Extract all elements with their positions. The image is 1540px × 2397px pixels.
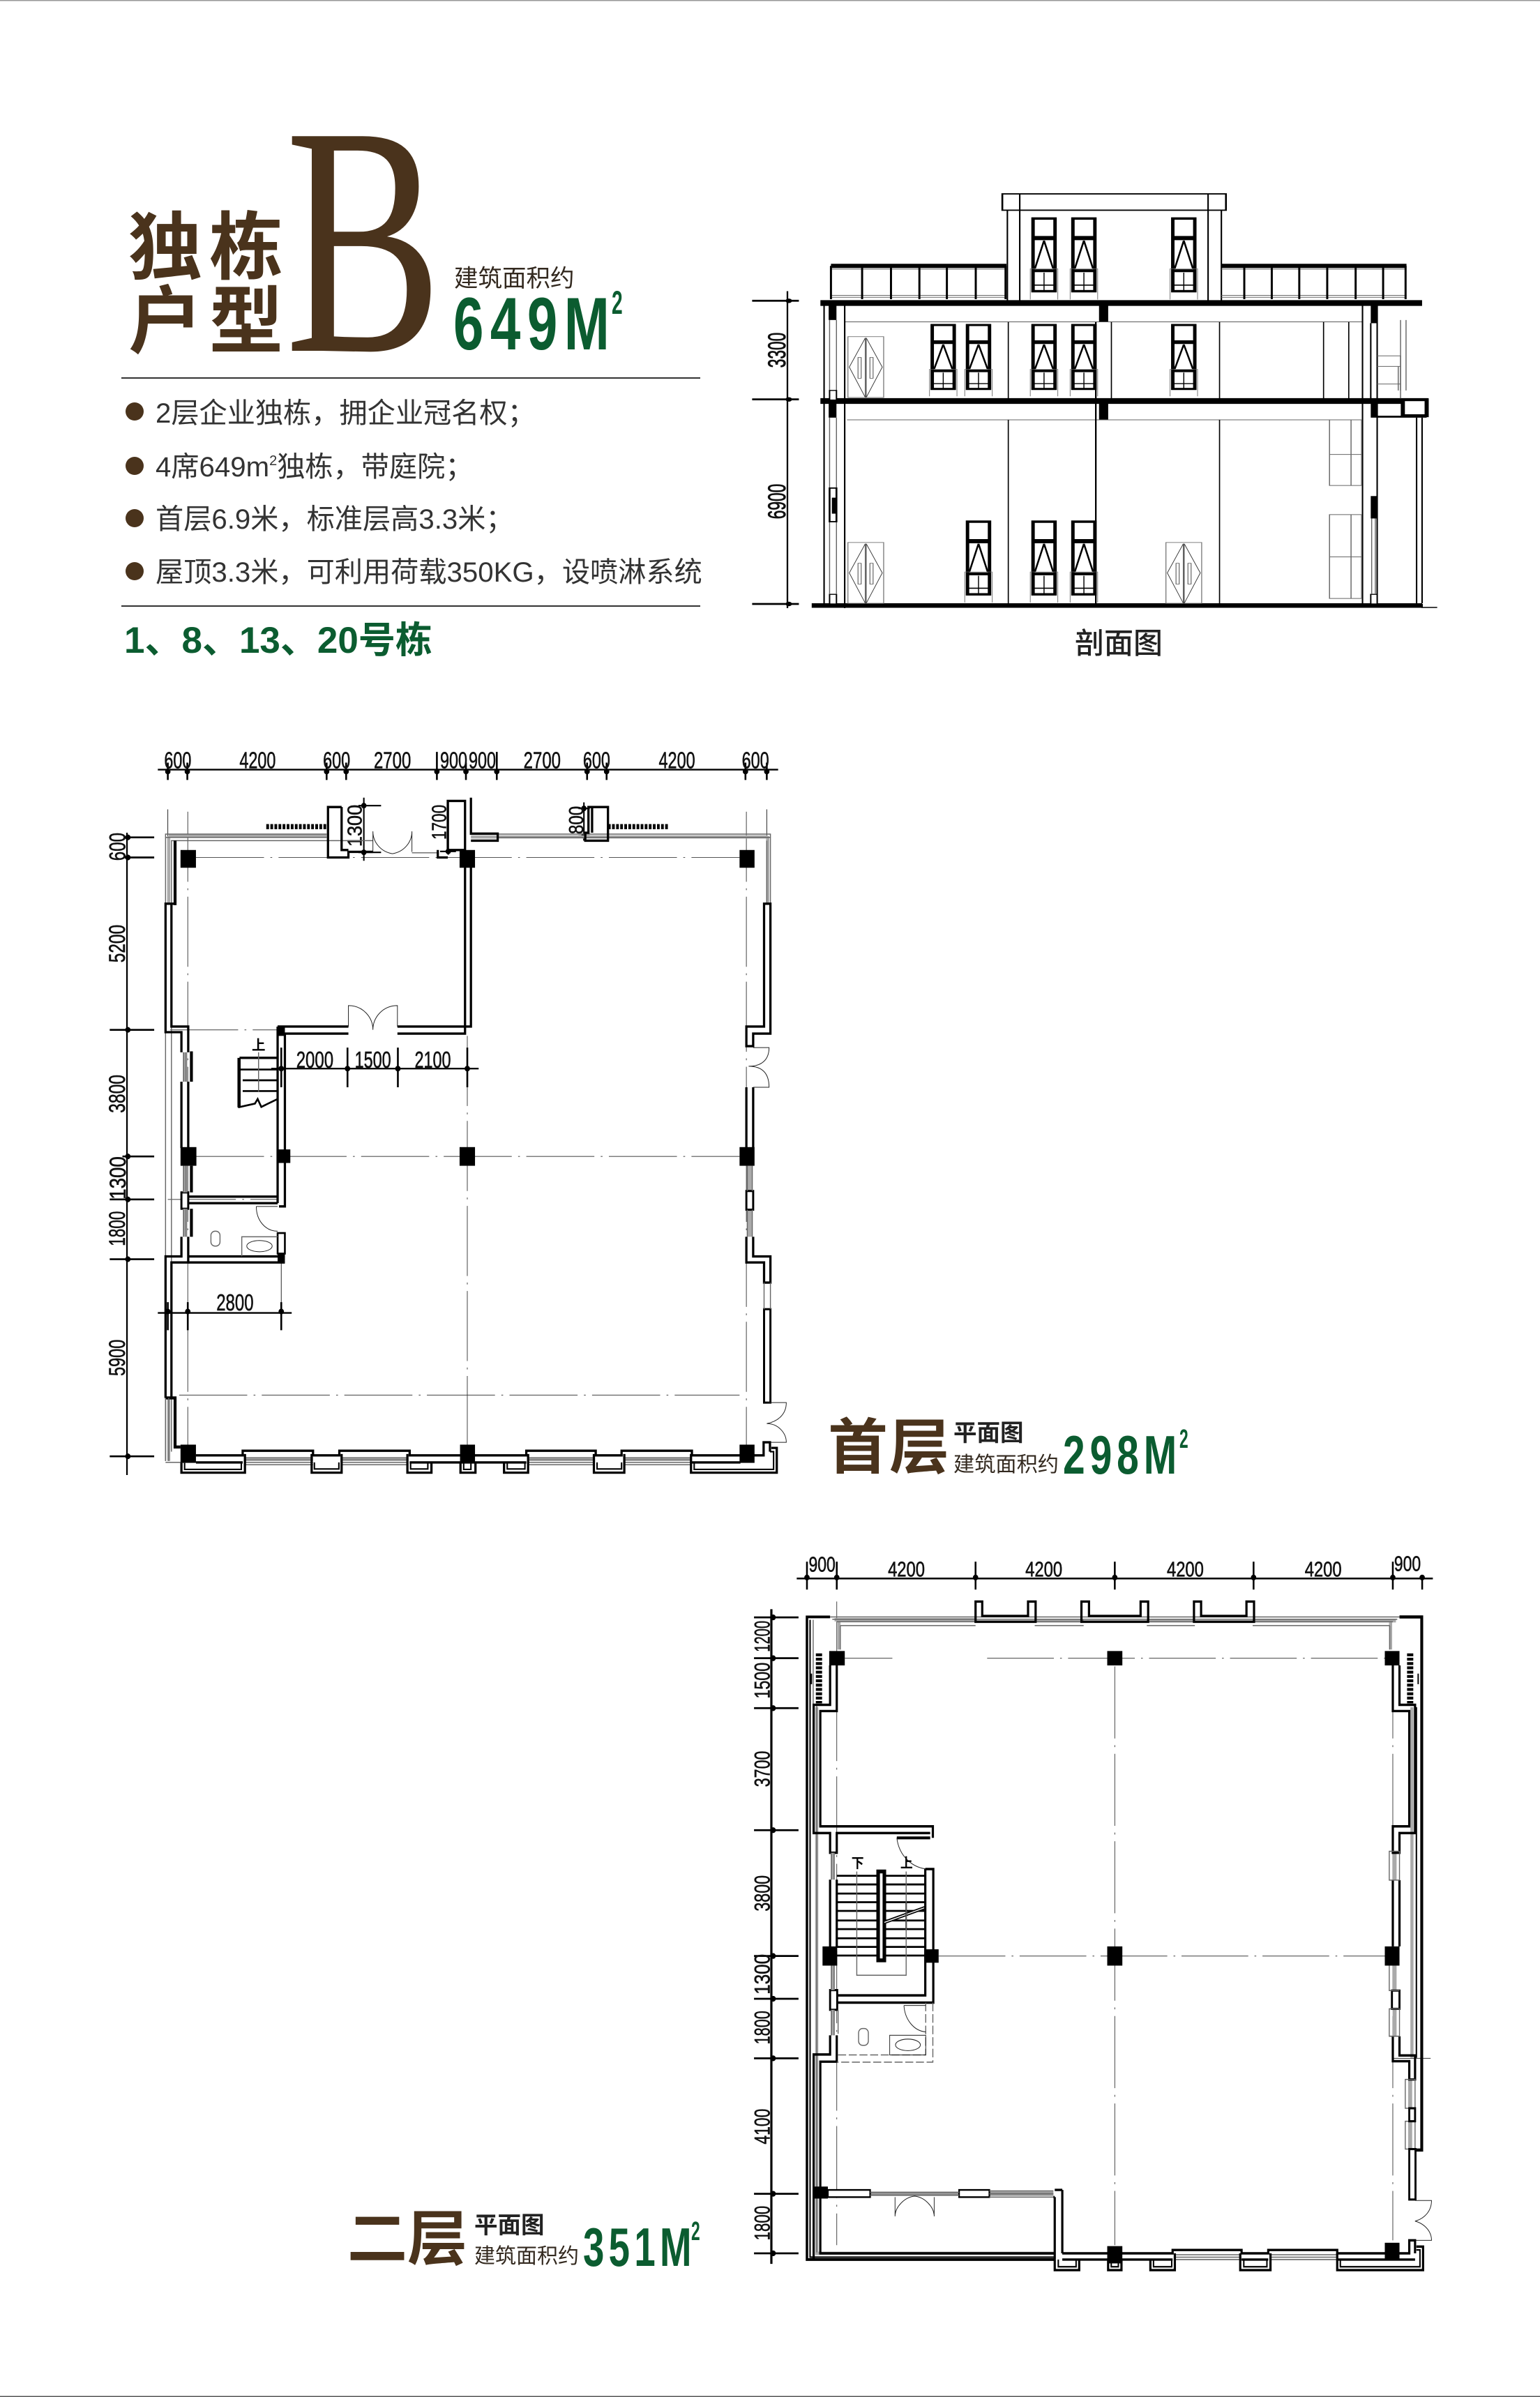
top dimension chain: 900 (809, 1554, 836, 1577)
left dimension chain: 3800 (750, 1875, 774, 1912)
first floor superscript: 2 (1179, 1424, 1188, 1453)
inner dimensions: 2800 (216, 1290, 254, 1315)
top dimension chain: 4200 (659, 747, 695, 773)
left dimension chain: 1800 (750, 2206, 774, 2240)
left dimension chain: 1500 (750, 1663, 774, 1699)
top dimension chain: 900 (440, 747, 467, 773)
section drawing (752, 194, 1437, 660)
second floor area value: 351M (583, 2217, 696, 2278)
title: building type: 型 (209, 281, 283, 363)
first floor caption (828, 1414, 1188, 1485)
inner dimensions: 800 (566, 806, 588, 834)
plan axes (837, 1601, 1430, 2245)
balcony wall and doors (828, 2190, 1431, 2260)
top dimension chain (797, 1552, 1433, 1589)
washroom fixtures (211, 1231, 278, 1257)
total area superscript: 2 (612, 285, 623, 322)
second floor caption (347, 2206, 700, 2278)
top dimension chain: 600 (742, 747, 769, 773)
total area value: 649M (453, 282, 616, 365)
feature 3: 首层6.9米，标准层高3.3米； (156, 504, 514, 535)
left dimension chain: 1200 (750, 1621, 774, 1652)
feature list (126, 398, 702, 588)
top dimension chain: 900 (1394, 1552, 1421, 1576)
title: building type: 独 (128, 207, 202, 289)
building numbers: 1、8、13、20号栋 (124, 620, 432, 661)
left dimension chain: 3700 (750, 1751, 774, 1787)
left dimension chain: 5200 (104, 925, 130, 962)
stair: 上 (900, 1855, 913, 1870)
south facade bays (1055, 2240, 1423, 2270)
left dimension chain (104, 833, 154, 1475)
inner dimensions: 1700 (429, 805, 451, 840)
inner dimensions: 1500 (355, 1046, 391, 1073)
top dimension chain: 2700 (524, 747, 561, 773)
left dimension chain: 600 (105, 833, 130, 861)
stair: 上 (252, 1038, 265, 1054)
first floor area label: 建筑面积约 (953, 1453, 1059, 1476)
left dimension chain: 1800 (750, 2011, 774, 2044)
feature 2: 4席649m (156, 451, 269, 483)
left dimension chain: 4100 (750, 2109, 774, 2145)
left dimension chain: 3800 (104, 1075, 130, 1113)
plan axes (168, 810, 767, 1461)
stair (837, 1855, 933, 2002)
title: building type: 栋 (209, 207, 283, 289)
exterior walls (807, 1601, 1421, 2260)
inner dimensions: 2100 (415, 1046, 451, 1073)
first floor title: 首层 (828, 1414, 951, 1481)
feature 2: 独栋，带庭院； (277, 451, 474, 483)
second floor title: 二层 (347, 2206, 467, 2273)
washroom (837, 2002, 933, 2062)
top dimension chain: 4200 (1025, 1559, 1062, 1582)
south facade bays (181, 1442, 777, 1473)
title block (128, 60, 623, 422)
inner dimensions (158, 798, 590, 1330)
section dimension 3300: 3300 (764, 333, 791, 368)
top dimension chain: 2700 (374, 747, 411, 773)
left dimension chain: 5900 (104, 1340, 130, 1376)
feature 2 (126, 451, 474, 483)
stair (238, 1038, 278, 1107)
second floor superscript: 2 (691, 2216, 700, 2246)
top dimension chain: 600 (583, 747, 610, 773)
top dimension chain: 4200 (1305, 1559, 1342, 1582)
second floor area label: 建筑面积约 (474, 2245, 579, 2268)
left dimension chain: 1800 (104, 1211, 130, 1246)
inner dimensions: 1300 (345, 805, 366, 847)
left dimension chain: 1300 (105, 1156, 130, 1200)
feature 2: 2 (269, 453, 277, 469)
top dimension chain: 4200 (239, 747, 275, 773)
feature 4: 屋顶3.3米，可利用荷载350KG，设喷淋系统 (156, 557, 702, 588)
section label: 剖面图 (1075, 627, 1163, 660)
columns (814, 1651, 1400, 2263)
title: building type: 户 (128, 281, 202, 363)
section linework (752, 194, 1437, 608)
rule above features (121, 377, 700, 379)
top dimension chain: 600 (323, 747, 350, 773)
stair: 下 (852, 1855, 864, 1870)
doors (256, 831, 786, 1442)
total area label: 建筑面积约 (454, 266, 575, 292)
feature 1: 2层企业独栋，拥企业冠名权； (156, 398, 536, 429)
columns (181, 850, 755, 1463)
top dimension chain: 900 (469, 747, 496, 773)
first floor plan (104, 747, 786, 1475)
exterior walls and courtyard (165, 798, 771, 1462)
first floor area value: 298M (1063, 1425, 1182, 1485)
section dimension 6900: 6900 (764, 484, 791, 519)
top dimension chain (158, 747, 778, 780)
inner dimensions: 2000 (296, 1046, 333, 1073)
top dimension chain: 4200 (888, 1559, 925, 1582)
first floor plan label: 平面图 (953, 1421, 1024, 1446)
left dimension chain (750, 1609, 799, 2264)
second floor plan (750, 1552, 1433, 2270)
top dimension chain: 4200 (1167, 1559, 1204, 1582)
second floor plan label: 平面图 (474, 2213, 544, 2239)
title: large letter B: B (285, 60, 442, 422)
rule below features (121, 605, 700, 607)
top dimension chain: 600 (164, 747, 191, 773)
left dimension chain: 1300 (750, 1954, 774, 1995)
